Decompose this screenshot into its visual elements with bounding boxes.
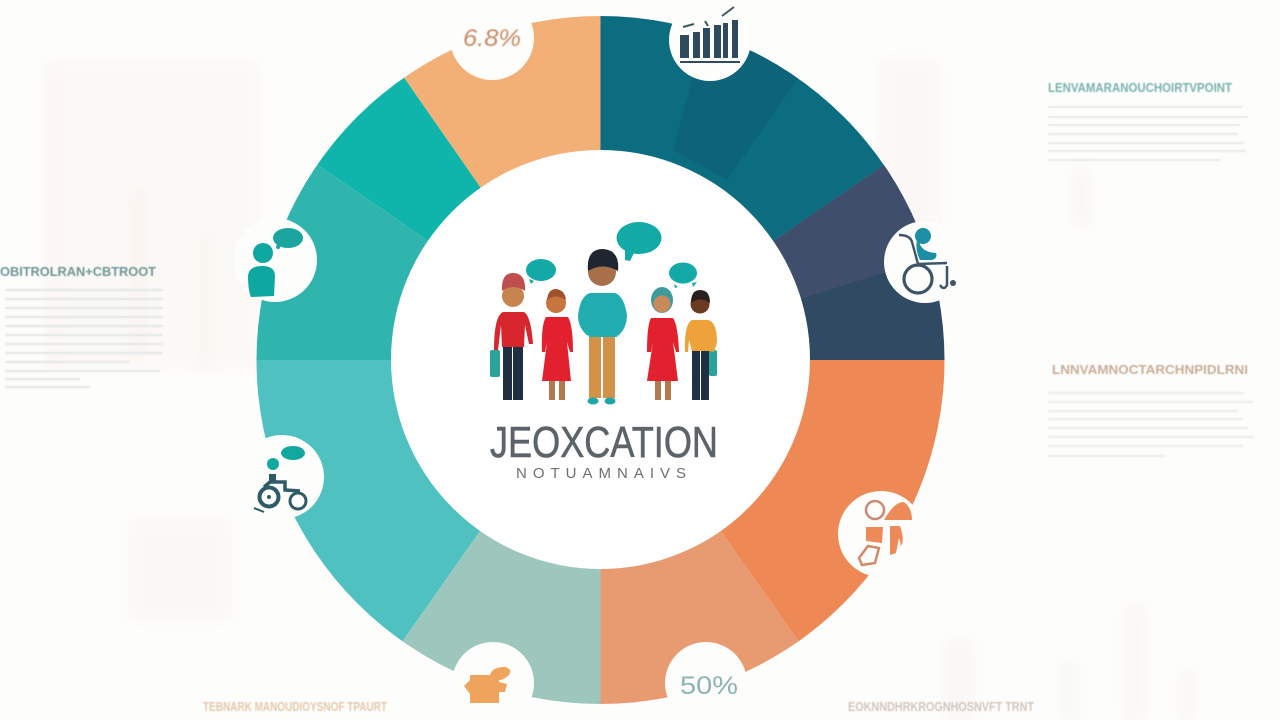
segment: orange — [721, 360, 944, 642]
icon circle: 50 percent — [665, 642, 747, 720]
segment: light teal — [256, 360, 480, 642]
right middle heading: LNNVAMNOCTARCHNPIDLRNI — [1052, 362, 1248, 377]
segment: sage — [402, 531, 600, 704]
segment: dark teal — [600, 16, 884, 241]
person: man in yellow — [685, 290, 717, 400]
person: woman in red — [542, 289, 573, 400]
left body lines — [5, 289, 163, 388]
icon circle: tools — [838, 491, 924, 577]
donut ring chart — [256, 16, 944, 704]
icon circle: document — [452, 642, 534, 720]
icon circle: person with speech bubble — [233, 218, 317, 302]
centre disc — [391, 150, 810, 569]
icon circle: cyclist — [240, 435, 324, 519]
segment: peach — [404, 16, 600, 188]
icon circle: bar chart — [669, 0, 751, 81]
segment: dark teal facet — [674, 52, 798, 178]
speech bubbles — [526, 222, 697, 288]
right top body lines — [1048, 106, 1248, 161]
left heading: OBITROLRAN+CBTROOT — [0, 264, 156, 279]
icon circle: percentage top: 6.8% — [463, 25, 521, 52]
title: JEOXCATION — [490, 418, 718, 467]
segment: navy — [774, 165, 944, 360]
right middle body lines — [1048, 392, 1254, 457]
right top heading: LENVAMARANOUCHOIRTVPOINT — [1048, 80, 1232, 95]
segment: bright teal — [318, 78, 481, 241]
icon circle: 50 percent: 50% — [680, 672, 738, 700]
bottom left heading: TEBNARK MANOUDIOYSNOF TPAURT — [203, 699, 387, 714]
segment: mid teal — [256, 164, 428, 360]
bottom right heading: EOKNNDHRKROGNHOSNVFT TRNT — [848, 699, 1034, 714]
person: man in red — [490, 273, 533, 400]
subtitle: NOTUAMNAIVS — [516, 465, 686, 482]
central group of people — [490, 222, 717, 404]
segment: slate facet — [774, 165, 916, 298]
person: tall man in teal — [578, 249, 627, 404]
person: woman with teal hair — [647, 287, 679, 400]
icon circle: percentage top — [450, 0, 534, 80]
segment: salmon — [600, 531, 798, 704]
icon circle: wheelchair — [884, 221, 966, 303]
